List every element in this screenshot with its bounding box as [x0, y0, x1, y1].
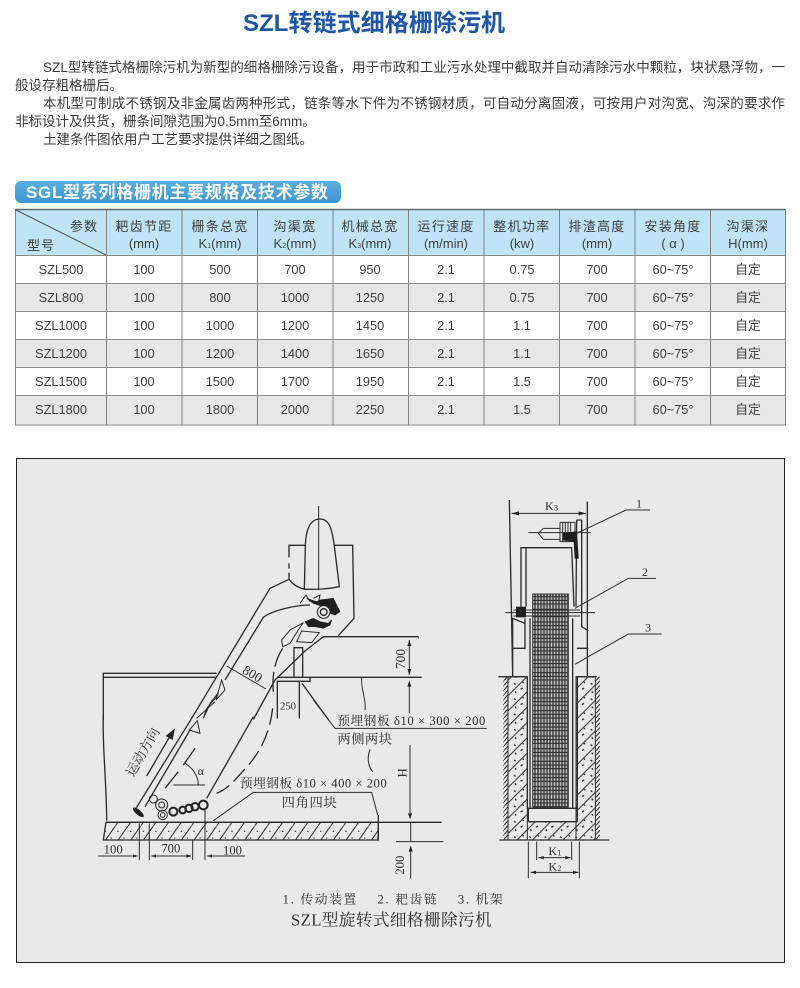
row SZL1200: [35, 346, 761, 361]
row SZL1500: 2.1: [437, 374, 455, 389]
angle alpha: α: [198, 764, 205, 778]
row SZL500: 0.75: [510, 262, 534, 277]
dimension 700: 700: [393, 649, 408, 669]
row SZL1800: SZL1800: [35, 402, 87, 417]
row SZL1000: [35, 318, 761, 333]
row SZL800: 60~75°: [652, 290, 694, 305]
dimension 200: [393, 822, 443, 878]
dimension K3: 3: [554, 504, 558, 513]
chain rollers: [132, 795, 208, 820]
row SZL1500: 60~75°: [652, 374, 694, 389]
table header row: 耙齿节距: [115, 219, 173, 234]
table header row: 排渣高度: [568, 219, 626, 234]
row SZL1000: 2.1: [437, 318, 455, 333]
table header row: 沟渠宽: [274, 219, 316, 234]
row SZL1200: 60~75°: [652, 346, 694, 361]
row SZL800: [39, 290, 761, 305]
dimension K1: 1: [557, 849, 561, 858]
row SZL1500: [35, 374, 761, 389]
row SZL1800: [35, 402, 761, 417]
callout 3: 3: [645, 621, 651, 635]
table header row: 整机功率: [493, 219, 551, 234]
dimension 250: 250: [280, 701, 296, 712]
table header row: 参数: [70, 219, 98, 234]
row SZL800: 1000: [281, 290, 309, 305]
row SZL500: 自定: [735, 262, 761, 277]
parts legend: 1. 传动装置 2. 耙齿链 3. 机架: [283, 892, 503, 907]
table header row: K3(mm): [349, 236, 391, 251]
dimension 700: [393, 637, 418, 713]
dimension K2: 2: [557, 864, 561, 873]
row SZL1500: 1950: [356, 374, 384, 389]
row SZL800: 1250: [356, 290, 384, 305]
front elevation: [498, 496, 662, 878]
motor and drive: [538, 522, 578, 558]
hood and housing: [103, 506, 422, 720]
drawing caption: SZL型旋转式细格栅除污机: [291, 911, 492, 930]
row SZL500: 700: [284, 262, 306, 277]
table header row: 机械总宽: [341, 219, 399, 234]
intro text block: 般设存粗格栅后。: [15, 78, 123, 93]
row SZL1800: 2000: [281, 402, 309, 417]
embedded plate label: corner: [240, 776, 387, 810]
row SZL1200: 1650: [356, 346, 384, 361]
rake grid: [533, 594, 568, 807]
row SZL500: 950: [359, 262, 381, 277]
section heading: table title: SGL型系列格栅机主要规格及技术参数: [26, 182, 328, 202]
row SZL800: 700: [586, 290, 608, 305]
row SZL1500: 自定: [735, 374, 761, 389]
table header row: 沟渠深: [727, 219, 769, 234]
embedded plate label: side: [337, 713, 485, 747]
table header row: (mm): [582, 236, 612, 251]
row SZL1500: 1700: [281, 374, 309, 389]
row SZL1000: SZL1000: [35, 318, 87, 333]
row SZL1200: 100: [133, 346, 155, 361]
row SZL1000: 自定: [735, 318, 761, 333]
callout 3: [575, 621, 662, 664]
callout 1: [577, 496, 650, 533]
title: SZL转链式细格栅除污机: [243, 10, 505, 37]
dimension 800: 800: [240, 662, 265, 685]
table header row: (mm): [129, 236, 159, 251]
row SZL1500: SZL1500: [35, 374, 87, 389]
row SZL800: 800: [209, 290, 231, 305]
row SZL1800: 自定: [735, 402, 761, 417]
row SZL800: 100: [133, 290, 155, 305]
row SZL1200: 1400: [281, 346, 309, 361]
intro text block: 非标设计及供货，栅条间隙范围为0.5mm至6mm。: [15, 113, 316, 129]
dimension 200: 200: [393, 856, 407, 875]
angle alpha: [173, 763, 205, 785]
concrete walls: [498, 677, 609, 840]
dimension K1: [537, 842, 572, 860]
row SZL500: 100: [133, 262, 155, 277]
dimension H: [396, 745, 412, 819]
embedded plate label: corner: 预埋钢板 δ10 × 400 × 200: [240, 776, 387, 791]
table header row: K1(mm): [199, 236, 241, 251]
side elevation: upper machine: [103, 506, 422, 720]
row SZL1200: SZL1200: [35, 346, 87, 361]
embedded plate label: corner: 四角四块: [282, 795, 337, 810]
row SZL500: 2.1: [437, 262, 455, 277]
row SZL1000: 1200: [281, 318, 309, 333]
bottom dimensions 100 700 100: 700: [161, 842, 180, 856]
row SZL1800: 100: [133, 402, 155, 417]
row SZL1500: 1.5: [513, 374, 531, 389]
side elevation: lower machine: [98, 700, 503, 930]
row SZL1800: 1800: [206, 402, 234, 417]
row SZL1200: 1200: [206, 346, 234, 361]
row SZL1000: 100: [133, 318, 155, 333]
table header row: 安装角度: [644, 219, 702, 234]
intro text block: 土建条件图依用户工艺要求提供详细之图纸。: [43, 131, 313, 147]
row SZL1200: 1.1: [513, 346, 531, 361]
row SZL800: 自定: [735, 290, 761, 305]
table header row: [27, 219, 769, 253]
intro text block: [15, 59, 785, 147]
embedded plate label: side: 预埋钢板 δ10 × 300 × 200: [337, 713, 485, 728]
intro text block: SZL型转链式格栅除污机为新型的细格栅除污设备，用于市政和工业污水处理中截取并自动清除污水中颗粒，块状悬浮物，一: [43, 59, 785, 75]
dimension K1: K: [548, 844, 557, 858]
row SZL1800: 1.5: [513, 402, 531, 417]
table header row: 型号: [27, 238, 55, 253]
row SZL1500: 100: [133, 374, 155, 389]
row SZL1200: 自定: [735, 346, 761, 361]
row SZL500: SZL500: [39, 262, 83, 277]
row SZL1800: 2250: [356, 402, 384, 417]
concrete slab: [103, 815, 442, 840]
table header row: 运行速度: [417, 219, 475, 234]
row SZL1800: 2.1: [437, 402, 455, 417]
specification table: [15, 209, 786, 425]
row SZL1000: 1450: [356, 318, 384, 333]
dimension 800: [227, 662, 266, 689]
dimension K3: [512, 499, 586, 515]
motion arrow and label: 运动方向: [122, 725, 163, 779]
row SZL1000: 1000: [206, 318, 234, 333]
row SZL500: 60~75°: [652, 262, 694, 277]
table header row: ( α ): [661, 236, 685, 251]
row SZL500: 700: [586, 262, 608, 277]
row SZL1000: 700: [586, 318, 608, 333]
row SZL500: 500: [209, 262, 231, 277]
callout 1: 1: [636, 496, 642, 510]
table header row: 栅条总宽: [191, 219, 249, 234]
table header row: (kw): [510, 236, 534, 251]
machine frame: [505, 500, 595, 822]
intro text block: 本机型可制成不锈钢及非金属齿两种形式，链条等水下件为不锈钢材质，可自动分离固液，可按用户对沟宽、沟深的要求作: [43, 95, 785, 111]
chain teeth: [203, 595, 320, 718]
row SZL1800: 700: [586, 402, 608, 417]
row SZL1000: 60~75°: [652, 318, 694, 333]
bottom dimensions 100 700 100: 100: [223, 843, 242, 857]
dimension K2: K: [548, 859, 557, 873]
dimension K2: [528, 842, 579, 878]
table header row: K2(mm): [274, 236, 316, 251]
row SZL1500: 700: [586, 374, 608, 389]
panel: engineering drawing: [16, 458, 784, 962]
row SZL800: 2.1: [437, 290, 455, 305]
row SZL500: [39, 262, 761, 277]
callout 2: 2: [642, 565, 648, 579]
table header row: H(mm): [728, 236, 768, 251]
bottom dimensions 100 700 100: 100: [104, 842, 123, 856]
row SZL1200: 2.1: [437, 346, 455, 361]
row SZL1500: 1500: [206, 374, 234, 389]
frame lines: [103, 700, 487, 821]
row SZL800: SZL800: [39, 290, 83, 305]
row SZL800: 0.75: [510, 290, 534, 305]
drive sprocket: [305, 598, 340, 628]
dimension H: H: [396, 768, 410, 777]
embedded plate label: side: 两侧两块: [337, 732, 392, 747]
callout 2: [575, 565, 656, 608]
row SZL1000: 1.1: [513, 318, 531, 333]
dimension K3: K: [545, 499, 554, 513]
bottom dimensions 100 700 100: [98, 810, 245, 860]
table header row: (m/min): [424, 236, 468, 251]
row SZL1200: 700: [586, 346, 608, 361]
row SZL1800: 60~75°: [652, 402, 694, 417]
